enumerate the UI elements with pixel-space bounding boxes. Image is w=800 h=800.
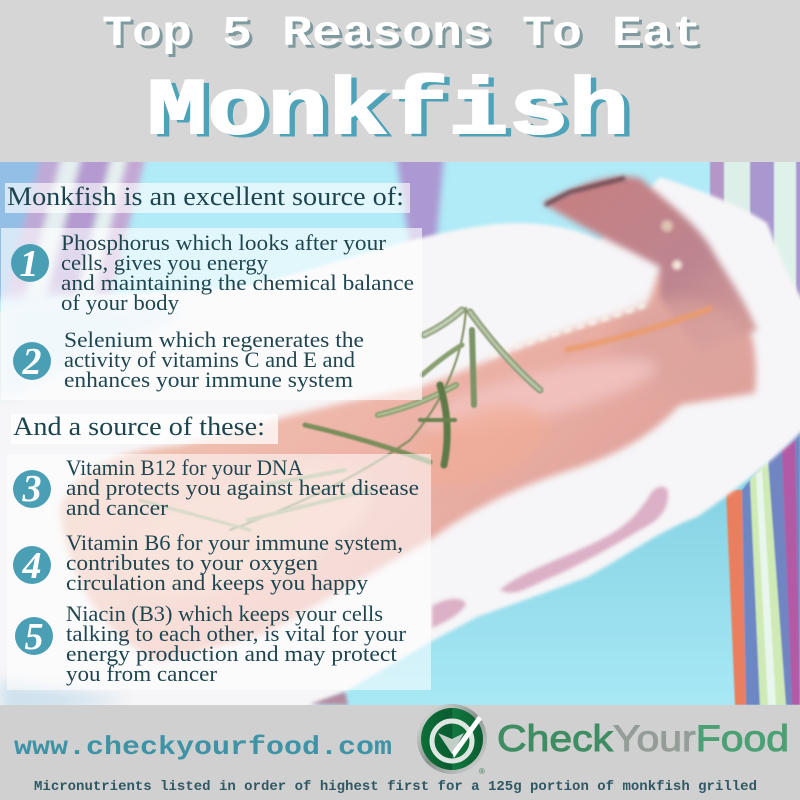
panel: reasons 1 and 2 bbox=[1, 228, 422, 400]
heading: And a source of these: And a source of these: bbox=[13, 412, 265, 441]
footnote: Micronutrients listed in order of highest first for a 125g portion of monkfish grilled bbox=[34, 780, 757, 795]
fish details bbox=[310, 178, 712, 705]
icon: number 4: 4 bbox=[22, 545, 42, 587]
text: phosphorus: Phosphorus which looks after your bbox=[61, 230, 387, 255]
text: phosphorus bbox=[61, 230, 414, 315]
panel: reasons 3 to 5 bbox=[7, 454, 431, 690]
website url: www.checkyourfood.com bbox=[14, 732, 392, 762]
header band bbox=[0, 0, 800, 162]
rosemary bbox=[140, 308, 540, 530]
icon: number 4 bbox=[13, 545, 51, 587]
text: vitamin B12: and cancer bbox=[66, 495, 169, 520]
icon: number 1 bbox=[11, 243, 49, 285]
title: Monkfish: Monkfish bbox=[153, 70, 635, 161]
text: selenium: activity of vitamins C and E and bbox=[64, 347, 355, 372]
fish body bbox=[60, 177, 757, 662]
text: vitamin B12: and protects you against heart disease bbox=[66, 475, 419, 500]
panel: heading and a source bbox=[11, 412, 278, 444]
icon: number 1: 1 bbox=[20, 243, 38, 285]
title: Monkfish: Monkfish bbox=[147, 67, 629, 158]
photo: monkfish on paper over striped cloth bbox=[0, 155, 800, 720]
icon: CheckYourFood logo mark bbox=[417, 704, 487, 776]
text: phosphorus: and maintaining the chemical balance bbox=[61, 270, 414, 295]
logo wordmark: Check YourFood bbox=[497, 718, 789, 759]
text: niacin: you from cancer bbox=[66, 661, 218, 686]
title: Top 5 Reasons To Eat: Top 5 Reasons To Eat bbox=[105, 12, 705, 61]
text: selenium bbox=[64, 327, 364, 392]
text: vitamin B12: Vitamin B12 for your DNA bbox=[66, 455, 303, 480]
text: vitamin B6: Vitamin B6 for your immune system, bbox=[66, 530, 403, 555]
text: selenium: enhances your immune system bbox=[64, 367, 353, 392]
text: vitamin B6: circulation and keeps you happy bbox=[66, 570, 368, 595]
text: niacin: Niacin (B3) which keeps your cells bbox=[66, 601, 383, 626]
text: vitamin B6: contributes to your oxygen bbox=[66, 550, 318, 575]
icon: number 5 bbox=[15, 616, 53, 658]
text: niacin bbox=[66, 601, 407, 686]
text: vitamin B6 bbox=[66, 530, 403, 595]
text: phosphorus: of your body bbox=[61, 290, 179, 315]
paper bbox=[0, 177, 800, 720]
title: Top 5 Reasons To Eat: Top 5 Reasons To Eat bbox=[102, 9, 702, 58]
icon: number 2: 2 bbox=[22, 341, 42, 383]
footer band bbox=[0, 705, 800, 800]
text: niacin: talking to each other, is vital for your bbox=[66, 621, 407, 646]
panel: heading excellent source bbox=[5, 182, 410, 213]
icon: number 5: 5 bbox=[24, 616, 44, 658]
icon: number 3: 3 bbox=[22, 468, 42, 510]
text: phosphorus: cells, gives you energy bbox=[61, 250, 268, 275]
icon: number 3 bbox=[13, 468, 51, 510]
icon: number 2 bbox=[13, 341, 51, 383]
icon: CheckYourFood logo mark: ® bbox=[479, 767, 485, 776]
text: niacin: energy production and may protect bbox=[66, 641, 397, 666]
text: selenium: Selenium which regenerates the bbox=[64, 327, 364, 352]
text: vitamin B12 bbox=[66, 455, 419, 520]
heading: Monkfish is an excellent source of: Monkfish is an excellent source of: bbox=[7, 182, 404, 211]
